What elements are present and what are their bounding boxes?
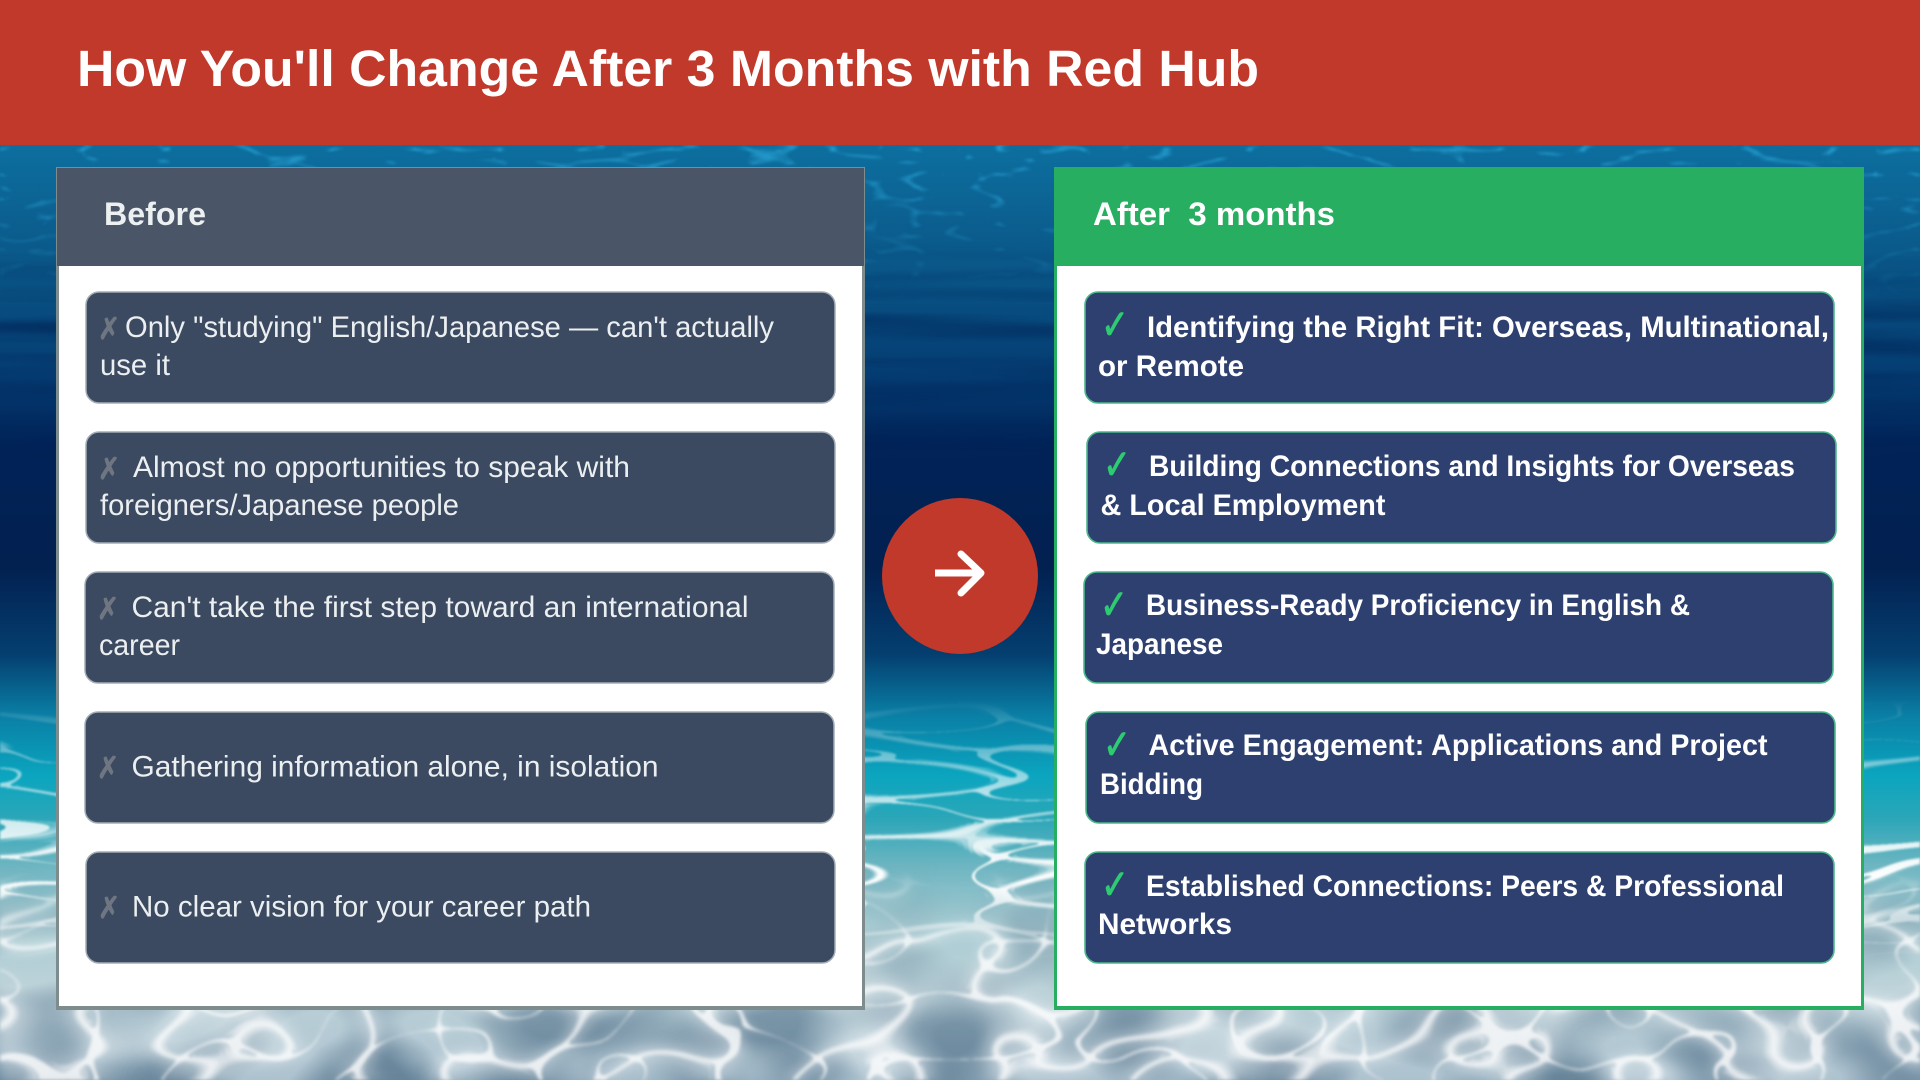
before header bar: [57, 168, 864, 266]
after item 5: ✓: [1101, 860, 1129, 909]
before item 2: Almost no opportunities to speak with: [133, 451, 630, 484]
after item 5: [1085, 852, 1834, 963]
panel: after: [1054, 167, 1864, 1010]
before item 4: Gathering information alone, in isolation: [132, 750, 658, 784]
after item 5: Established Connections: Peers & Professional: [1146, 870, 1784, 903]
before item 1: use it: [100, 349, 170, 382]
after item 1: ✓: [1101, 300, 1129, 349]
after item 3: Business-Ready Proficiency in English &: [1146, 589, 1690, 622]
after item 1: Identifying the Right Fit: Overseas, Multinational,: [1147, 311, 1829, 344]
after item 4: Active Engagement: Applications and Project: [1148, 729, 1768, 762]
after item 4: ✓: [1103, 720, 1131, 769]
after item 2: & Local Employment: [1100, 489, 1386, 522]
title banner: [0, 0, 1920, 145]
before item 1: [86, 292, 835, 403]
panel: before: [56, 167, 865, 1010]
title: How You'll Change After 3 Months with Red Hub: [77, 40, 1259, 97]
before item 2: ✗: [98, 452, 120, 487]
before item 2: foreigners/Japanese people: [100, 489, 459, 522]
before heading: Before: [104, 196, 206, 232]
after item 2: [1087, 432, 1836, 543]
after item 1: [1085, 292, 1834, 403]
after item 2: Building Connections and Insights for Overseas: [1149, 450, 1795, 483]
after item 3: [1084, 572, 1833, 683]
before item 1: Only "studying" English/Japanese — can't actually: [125, 311, 774, 344]
before item 3: career: [99, 629, 180, 662]
before item 5: ✗: [98, 891, 120, 926]
before item 2: [86, 432, 835, 543]
before item 5: No clear vision for your career path: [132, 890, 591, 924]
after item 4: [1086, 712, 1835, 823]
before item 3: Can't take the first step toward an international: [132, 591, 748, 624]
before item 5: [86, 852, 835, 963]
arrow circle: [882, 498, 1038, 654]
icon: right arrow: [935, 554, 981, 593]
after item 5: Networks: [1098, 908, 1232, 941]
after heading: After 3 months: [1093, 196, 1335, 232]
after item 4: Bidding: [1100, 768, 1203, 801]
before item 3: [85, 572, 834, 683]
after item 3: Japanese: [1096, 628, 1223, 661]
after item 1: or Remote: [1098, 350, 1244, 383]
before item 3: ✗: [97, 592, 119, 627]
after item 2: ✓: [1103, 440, 1131, 489]
before item 4: [85, 712, 834, 823]
before item 4: ✗: [97, 751, 119, 786]
after item 3: ✓: [1100, 580, 1128, 629]
before item 1: ✗: [98, 312, 120, 347]
